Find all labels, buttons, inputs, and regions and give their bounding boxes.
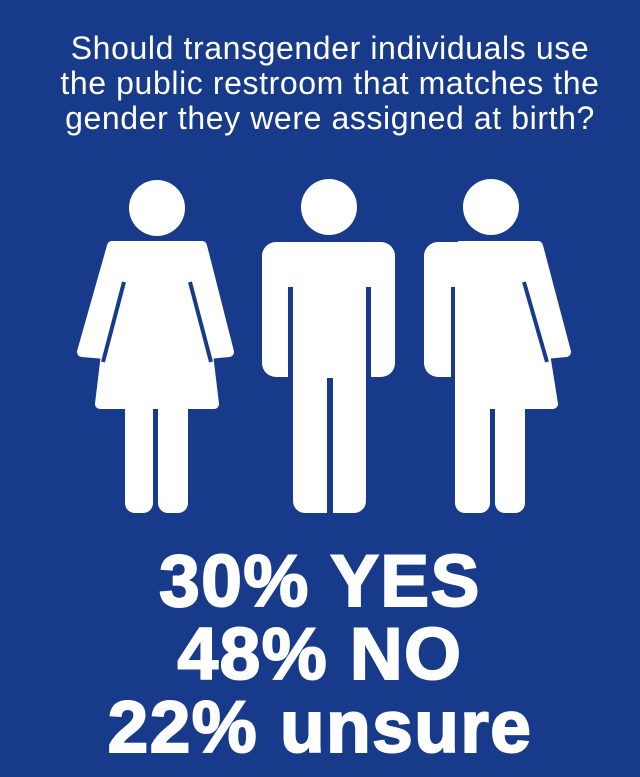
poll results: 48% NO [178, 614, 462, 695]
title [60, 30, 600, 136]
poll results: 30% YES [159, 541, 481, 622]
icon: woman figure [82, 180, 229, 513]
poll results: 22% unsure [108, 687, 532, 768]
title: the public restroom that matches the [60, 65, 600, 101]
title: gender they were assigned at birth? [65, 100, 595, 136]
title: Should transgender individuals use [71, 30, 589, 66]
icon: transgender figure [424, 179, 566, 513]
icon: man figure [262, 179, 395, 518]
poll results [108, 541, 532, 768]
